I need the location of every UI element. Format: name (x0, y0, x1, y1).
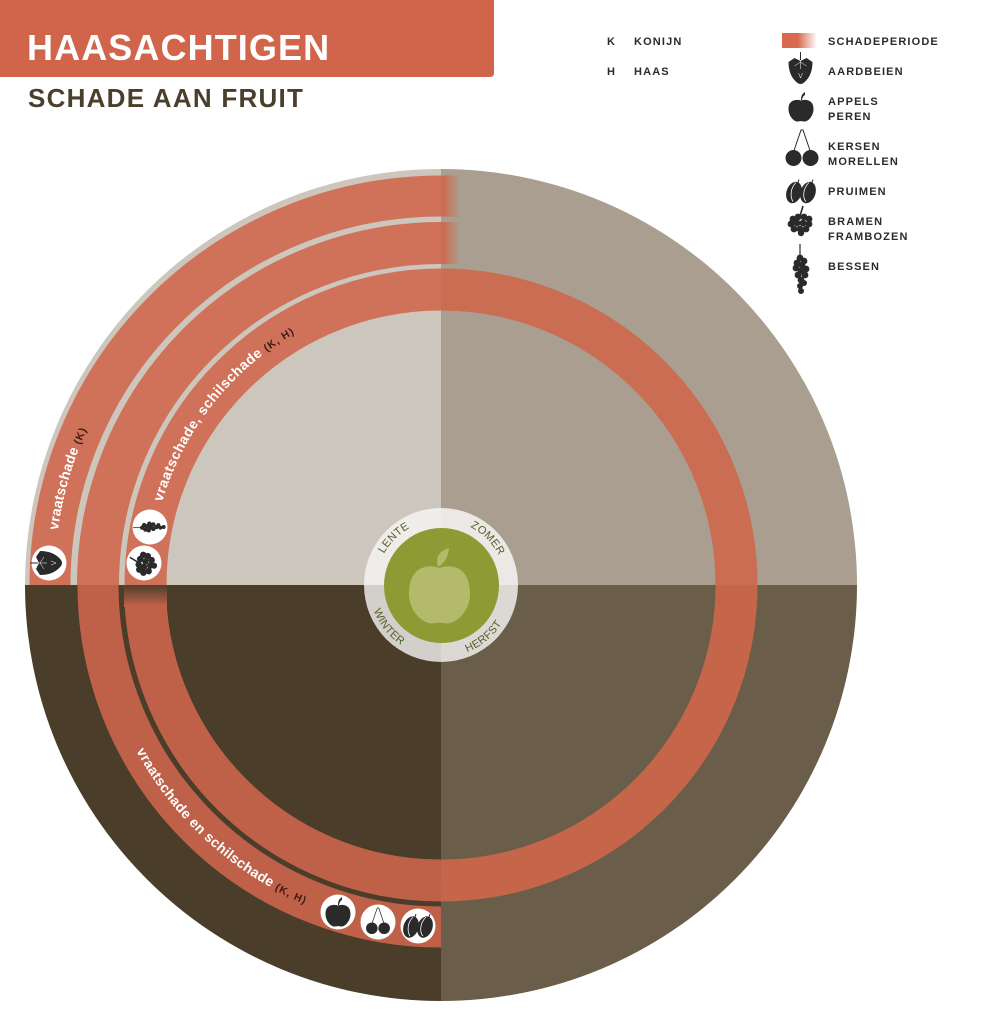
ring 2 fade into summer (441, 222, 462, 265)
center hub (364, 508, 518, 662)
ring 1: outer damage band spring (50, 196, 441, 585)
ring 3: inner band summer (441, 290, 736, 585)
ring 3: fade start in winter (124, 585, 167, 607)
ring 1 fade into summer (441, 176, 462, 217)
icon: bessen on ring 3 (132, 510, 168, 544)
legend: damage period and fruit (782, 33, 939, 294)
legend item: bramen frambozen: FRAMBOZEN (828, 231, 909, 243)
icon: appel on ring 2 (320, 894, 356, 930)
subtitle: SCHADE AAN FRUIT (28, 83, 304, 113)
season label: herfst: HERFST (464, 620, 500, 652)
key: konijn: KONIJN (634, 36, 682, 48)
icon: apple in hub (409, 548, 470, 624)
legend item: bramen frambozen: BRAMEN (828, 216, 883, 228)
season quadrant: zomer (441, 169, 857, 585)
legend item: kersen morellen: KERSEN (828, 141, 881, 153)
icon: pruimen on ring 2 (400, 908, 436, 944)
season quadrant: lente (25, 169, 441, 585)
label: vraatschade (K): vraatschade (K) (50, 428, 88, 530)
label: vraatschade en schilschade (K, H): vraatschade en schilschade (K, H) (138, 747, 306, 906)
hub segment: lente (364, 508, 441, 585)
legend item: pruimen (783, 180, 887, 205)
ring 3: inner band autumn (441, 585, 736, 880)
legend: species key (607, 36, 682, 78)
legend item: appels peren (788, 92, 879, 123)
legend swatch: schadeperiode: SCHADEPERIODE (828, 36, 939, 48)
season quadrant: herfst (441, 585, 857, 1001)
season label: lente: LENTE (378, 522, 409, 553)
hub segment: herfst (441, 585, 518, 662)
season quadrant: winter (25, 585, 441, 1001)
seasonal wheel (25, 169, 857, 1001)
key: haas: H (607, 66, 616, 78)
season label: winter: WINTER (374, 607, 404, 645)
legend item: bessen (793, 244, 880, 294)
title: HAASACHTIGEN (27, 27, 330, 68)
label: vraatschade, schilschade (K, H): vraatschade, schilschade (K, H) (155, 328, 294, 500)
legend item: kersen morellen: MORELLEN (828, 156, 899, 168)
ring 3: inner band spring (146, 290, 441, 585)
ring 2: winter band (98, 585, 441, 927)
legend item: appels peren: APPELS (828, 96, 879, 108)
icon: kersen on ring 2 (360, 904, 396, 940)
legend item: pruimen: PRUIMEN (828, 186, 887, 198)
hub segment: zomer (441, 508, 518, 585)
ring 2: middle damage band spring (98, 243, 441, 585)
icon: bramen on ring 3 (126, 546, 162, 580)
header banner (0, 0, 494, 77)
key: konijn: K (607, 36, 616, 48)
legend item: aardbeien (788, 52, 904, 84)
hub green disc (384, 528, 499, 643)
legend item: bramen frambozen (788, 206, 909, 243)
legend item: appels peren: PEREN (828, 111, 872, 123)
legend item: bessen: BESSEN (828, 261, 880, 273)
season label: zomer: ZOMER (470, 520, 504, 555)
legend swatch: schadeperiode (782, 33, 939, 48)
legend item: aardbeien: AARDBEIEN (828, 66, 904, 78)
hub segment: winter (364, 585, 441, 662)
ring 3: inner band winter (146, 606, 441, 881)
icon: aardbei on ring 1 (30, 546, 66, 580)
key: haas: HAAS (634, 66, 670, 78)
legend item: kersen morellen (786, 130, 899, 168)
